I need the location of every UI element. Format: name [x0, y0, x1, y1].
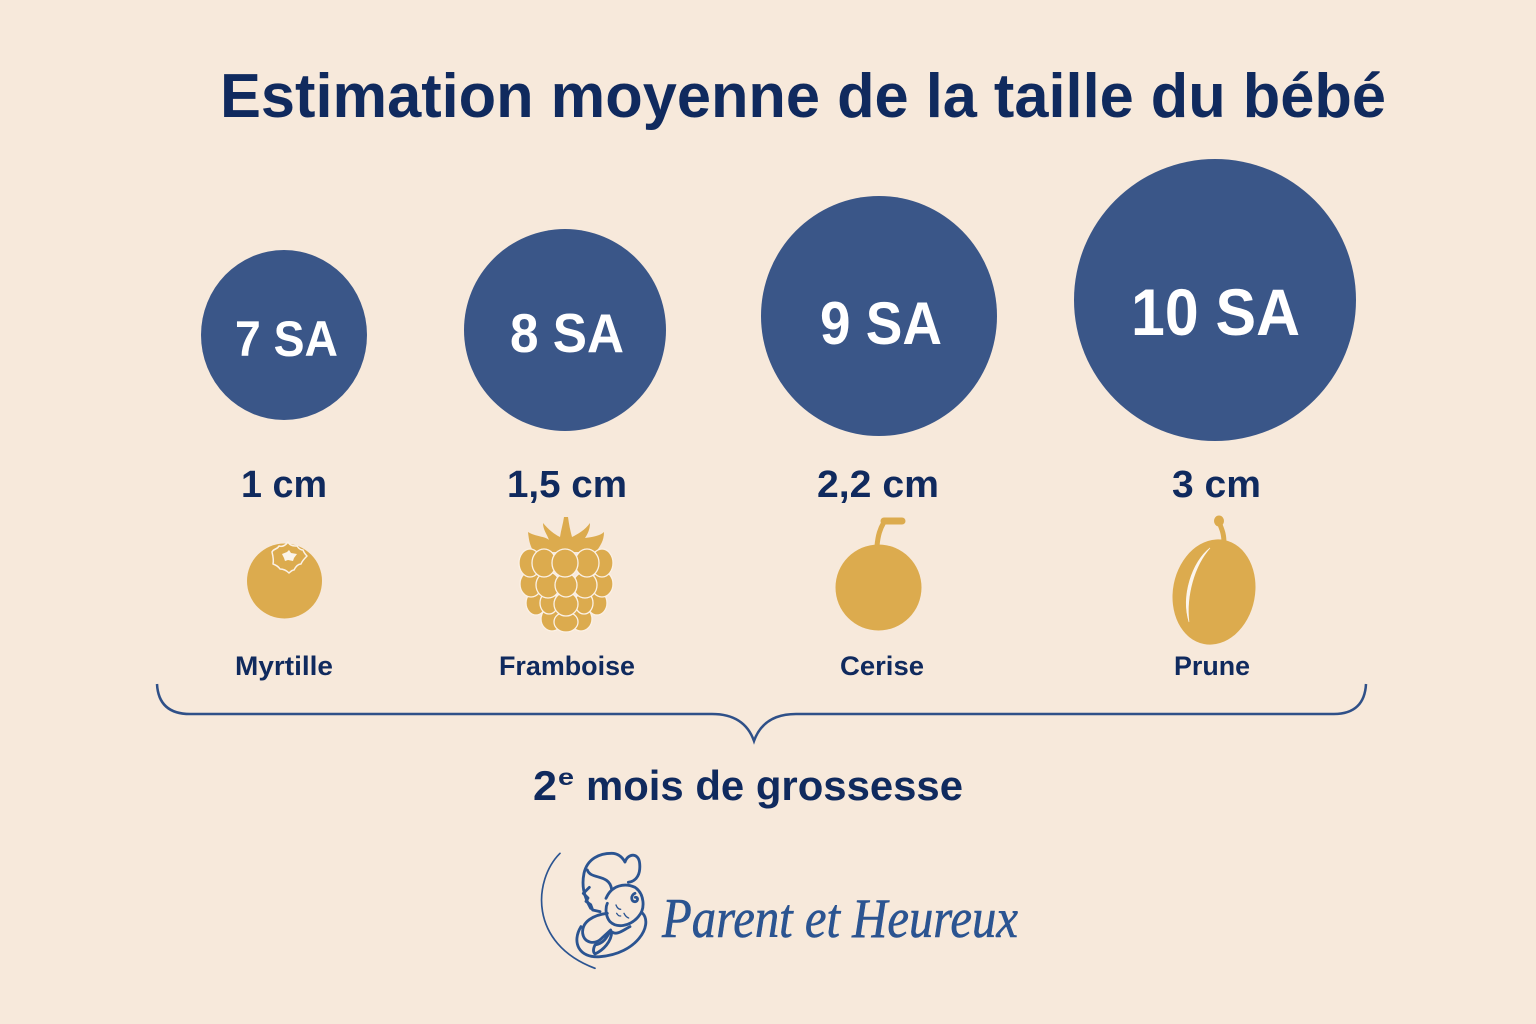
caption: 2e mois de grossesse: mois de grossesse	[586, 762, 963, 809]
logo: Parent et Heureux	[542, 853, 1018, 968]
icon: raspberry	[519, 517, 613, 632]
title: Estimation moyenne de la taille du bébé	[220, 62, 1386, 131]
circle: 9 SA	[761, 196, 997, 436]
caption: 2e mois de grossesse: 2	[533, 762, 557, 809]
label: Cerise: Cerise	[840, 651, 924, 681]
circle: 9 SA: 9 SA	[820, 290, 942, 357]
icon: cherry	[836, 521, 922, 630]
size: 1 cm: 1 cm	[241, 464, 327, 506]
icon: mother and baby	[542, 853, 646, 968]
circle: 10 SA: 10 SA	[1131, 275, 1300, 349]
label: Prune: Prune	[1174, 651, 1250, 681]
circle: 8 SA: 8 SA	[510, 302, 624, 364]
circle: 10 SA	[1074, 159, 1356, 441]
label: Myrtille: Myrtille	[235, 651, 333, 681]
size: 2,2 cm: 2,2 cm	[817, 464, 939, 506]
circle: 7 SA: 7 SA	[235, 311, 338, 367]
brace	[157, 684, 1366, 741]
size: 1,5 cm: 1,5 cm	[507, 464, 627, 506]
icon: plum	[1164, 516, 1264, 652]
label: Framboise: Framboise	[499, 651, 635, 681]
circle: 7 SA	[201, 250, 367, 420]
size: 3 cm: 3 cm	[1172, 464, 1261, 506]
icon: blueberry	[247, 542, 322, 618]
caption: 2e mois de grossesse: e	[558, 764, 574, 790]
wordmark: Parent et Heureux	[661, 888, 1018, 950]
circle: 8 SA	[464, 229, 666, 431]
